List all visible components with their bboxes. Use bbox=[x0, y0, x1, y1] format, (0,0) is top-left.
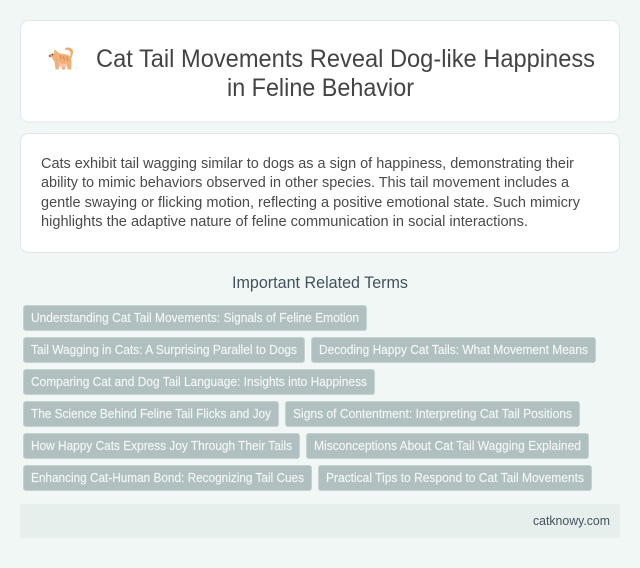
tag bbox=[24, 306, 366, 330]
title text: in Feline Behavior bbox=[227, 75, 414, 102]
heading: important related terms: Important Related Terms bbox=[232, 274, 408, 292]
tag bbox=[306, 434, 588, 458]
panel: description card bbox=[20, 134, 620, 252]
tag bbox=[24, 434, 300, 458]
footer source text: catknowy.com bbox=[533, 513, 610, 528]
tag cloud bbox=[24, 306, 596, 490]
tag bbox=[24, 338, 304, 362]
tag: Practical Tips to Respond to Cat Tail Movements bbox=[326, 470, 584, 485]
tag: The Science Behind Feline Tail Flicks and Joy bbox=[31, 406, 272, 421]
description text bbox=[41, 156, 581, 230]
tag: Tail Wagging in Cats: A Surprising Parallel to Dogs bbox=[31, 342, 297, 357]
tag bbox=[312, 338, 596, 362]
tag bbox=[24, 370, 374, 394]
tag: Decoding Happy Cat Tails: What Movement Means bbox=[319, 342, 588, 357]
tag: Understanding Cat Tail Movements: Signals of Feline Emotion bbox=[31, 310, 359, 325]
tag bbox=[318, 466, 592, 490]
tag: Enhancing Cat-Human Bond: Recognizing Tail Cues bbox=[31, 470, 304, 485]
tag: How Happy Cats Express Joy Through Their Tails bbox=[31, 438, 292, 453]
tag: Comparing Cat and Dog Tail Language: Insights into Happiness bbox=[31, 374, 367, 389]
footer bar bbox=[20, 504, 620, 538]
description text: ability to mimic behaviors observed in other species. This tail movement includes a bbox=[41, 175, 570, 191]
tag bbox=[24, 402, 278, 426]
tag bbox=[24, 466, 312, 490]
title text: Cat Tail Movements Reveal Dog-like Happiness bbox=[96, 46, 595, 73]
description text: highlights the adaptive nature of feline communication in social interactions. bbox=[41, 214, 528, 230]
icon: cat bbox=[48, 48, 73, 70]
panel: title card bbox=[20, 20, 620, 122]
tag bbox=[286, 402, 580, 426]
tag: Signs of Contentment: Interpreting Cat Tail Positions bbox=[293, 406, 572, 421]
title text bbox=[96, 46, 595, 102]
tag: Misconceptions About Cat Tail Wagging Explained bbox=[314, 438, 581, 453]
description text: Cats exhibit tail wagging similar to dogs as a sign of happiness, demonstrating their bbox=[41, 156, 574, 172]
description text: gentle swaying or flicking motion, reflecting a positive emotional state. Such mimicry bbox=[41, 195, 581, 211]
